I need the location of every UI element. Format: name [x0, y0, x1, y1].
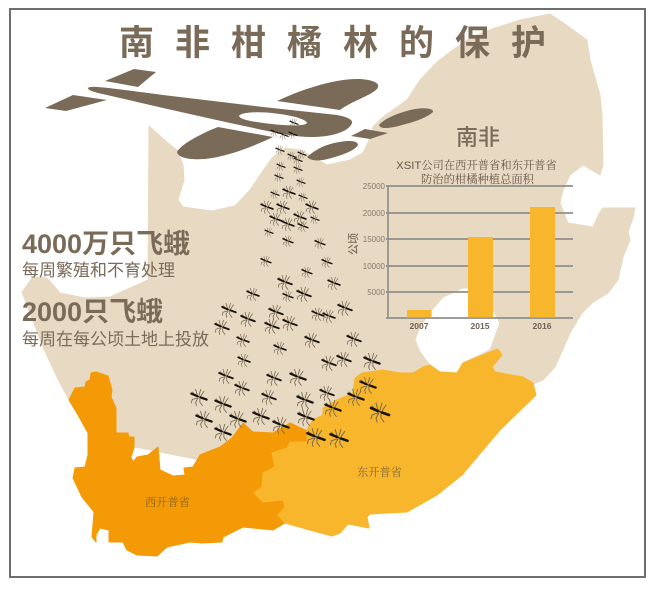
plane right wing: [307, 141, 358, 160]
heading: South Africa: 南非: [456, 125, 500, 150]
stat description: 每周在每公顷土地上投放: [22, 330, 209, 349]
land: South Africa base: [22, 14, 635, 480]
stat value: 2000只飞蛾: [22, 297, 163, 327]
label: Western Cape: 西开普省: [145, 495, 191, 509]
y-axis tick labels: 25000: [363, 182, 386, 191]
bar 2007: [407, 310, 432, 318]
bar 2016: [530, 207, 555, 318]
y-axis tick labels: 10000: [363, 262, 386, 271]
title: 南非柑橘林的保护: [119, 24, 546, 63]
x-axis year labels: 2016: [533, 321, 552, 331]
region: Eastern Cape: [254, 349, 536, 536]
stat description: 每周繁殖和不育处理: [22, 261, 175, 280]
plane fuselage with window: [88, 87, 352, 137]
y-axis tick labels: 5000: [367, 288, 386, 297]
x-axis year labels: 2015: [471, 321, 490, 331]
plane far wing: [379, 108, 433, 128]
bar 2015: [468, 237, 493, 318]
plane right stabiliser: [351, 129, 388, 139]
chart gridlines and axis: [386, 186, 573, 318]
stat: 20 million moths: [22, 297, 209, 349]
chart title: XSIT公司在西开普省和东开普省: [396, 158, 558, 172]
plane upper wing: [277, 79, 378, 110]
label: Eastern Cape: 东开普省: [357, 465, 403, 479]
x-axis year labels: 2007: [410, 321, 429, 331]
y-axis tick labels: 15000: [363, 235, 386, 244]
y-axis tick labels: 20000: [363, 209, 386, 218]
icon: airplane: [45, 69, 433, 160]
plane tail fin lower: [45, 95, 107, 111]
chart title: 防治的柑橘种植总面积: [421, 172, 535, 186]
plane tail fin upper: [105, 69, 156, 87]
moth swarm: [191, 119, 389, 447]
bar chart: [347, 182, 573, 331]
stat value: 4000万只飞蛾: [22, 229, 190, 259]
plane lower wing: [177, 127, 273, 159]
stat: 40 million moths: [22, 229, 190, 280]
region: Western Cape: [69, 372, 307, 556]
y-axis title: 公顷: [347, 233, 360, 255]
